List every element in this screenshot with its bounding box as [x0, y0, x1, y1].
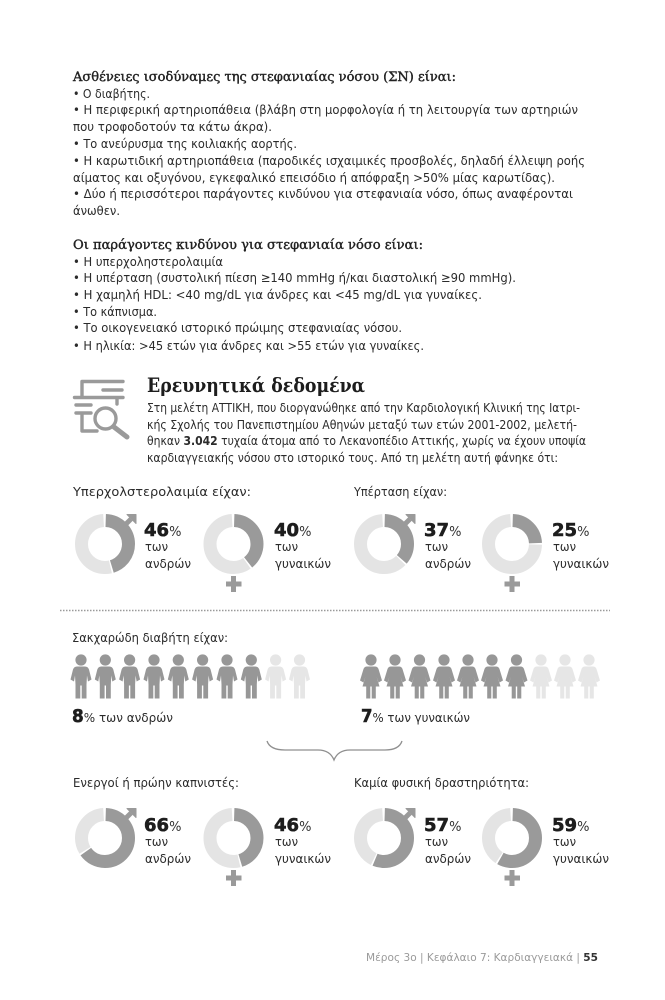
panel: smokers	[73, 776, 331, 886]
heading: risk factors: Οι παράγοντες κινδύνου για στεφανιαία νόσο είναι:	[73, 238, 423, 253]
list: risk factors: • Η υπερχοληστερολαιμία	[73, 255, 223, 270]
value: 59% of women: γυναικών	[553, 852, 609, 867]
value: 25% of women	[552, 520, 609, 572]
list: equivalent conditions: που τροφοδοτούν τα κάτω άκρα).	[73, 120, 272, 135]
text block: equivalent conditions of coronary disease	[72, 70, 585, 219]
list: equivalent conditions: • Η καρωτιδική αρτηριοπάθεια (παροδικές ισχαιμικές προσβολές, δηλαδή έλλειψη ροής	[73, 154, 585, 169]
value: 46% of men	[144, 520, 191, 572]
value: 25% of women: 25%	[552, 520, 589, 541]
list: equivalent conditions: • Το ανεύρυσμα της κοιλιακής αορτής.	[73, 137, 297, 152]
list: equivalent conditions: • Δύο ή περισσότεροι παράγοντες κινδύνου για στεφανιαία νόσο, όπως αναφέρονται	[73, 187, 573, 202]
value: 66% of men: των	[145, 835, 168, 850]
brace connector	[267, 741, 402, 760]
text block: ATTICA study intro: Στη μελέτη ΑΤΤΙΚΗ, που διοργανώθηκε από την Καρδιολογική Κλινική της Ιατρι-	[147, 401, 580, 416]
list: risk factors: • Το οικογενειακό ιστορικό πρώιμης στεφανιαίας νόσου.	[73, 321, 402, 336]
donut: 25% of women	[488, 520, 536, 592]
value: 37% of men: των	[425, 540, 448, 555]
text block: ATTICA study intro: κής Σχολής του Πανεπιστημίου Αθηνών μεταξύ των ετών 2001-2002, μελετή-	[147, 418, 577, 433]
section heading: research data: Ερευνητικά δεδομένα	[147, 373, 365, 397]
value: 46% of men: 46%	[144, 520, 181, 541]
donut: 46% of men	[82, 514, 136, 568]
value: 40% of women: γυναικών	[275, 557, 331, 572]
panel: hypercholesterolemia	[72, 485, 331, 592]
icon: books and magnifier	[74, 382, 127, 437]
list: risk factors: • Η χαμηλή HDL: <40 mg/dL για άνδρες και <45 mg/dL για γυναίκες.	[73, 288, 482, 303]
value: 46% of men: των	[145, 540, 168, 555]
donut: 46% of women	[210, 814, 257, 886]
value: 8% of men: 8% των ανδρών	[72, 706, 173, 727]
label: hypercholesterolemia: Υπερχολστερολαιμία είχαν:	[72, 485, 251, 500]
list: equivalent conditions: • Ο διαβήτης.	[73, 87, 150, 102]
text block: ATTICA study intro: καρδιαγγειακής νόσου στο ιστορικό τους. Από τη μελέτη αυτή φάνηκε ότι:	[147, 451, 558, 466]
list: equivalent conditions: αίματος και οξυγόνου, εγκεφαλικό επεισόδιο ή απόφραξη >50% μίας καρωτίδας).	[73, 171, 555, 186]
value: 37% of men	[424, 520, 471, 572]
label: diabetes: Σακχαρώδη διαβήτη είχαν:	[72, 631, 228, 646]
panel: no physical activity	[354, 776, 609, 886]
footer: page reference: Μέρος 3ο | Κεφάλαιο 7: Καρδιαγγειακά | 55	[366, 952, 598, 964]
value: 46% of women: γυναικών	[275, 852, 331, 867]
list: equivalent conditions: άνωθεν.	[73, 204, 120, 219]
pictogram: 7 of 10 women	[360, 654, 600, 698]
heading: equivalent conditions: Ασθένειες ισοδύναμες της στεφανιαίας νόσου (ΣΝ) είναι:	[72, 70, 456, 85]
value: 25% of women: γυναικών	[553, 557, 609, 572]
value: 59% of women: 59%	[552, 815, 589, 836]
value: 46% of women: των	[275, 835, 298, 850]
label: smokers: Ενεργοί ή πρώην καπνιστές:	[73, 776, 239, 791]
value: 40% of women: των	[275, 540, 298, 555]
donut: 37% of men	[360, 514, 415, 568]
value: 46% of women: 46%	[274, 815, 311, 836]
text block: ATTICA study intro	[147, 401, 586, 466]
text block: risk factors for coronary disease	[73, 238, 516, 354]
value: 66% of men: 66%	[144, 815, 181, 836]
donut: 66% of men	[82, 808, 136, 862]
value: 46% of women	[274, 815, 331, 867]
label: hypertension: Υπέρταση είχαν:	[353, 485, 447, 500]
list: risk factors: • Η υπέρταση (συστολική πίεση ≥140 mmHg ή/και διαστολική ≥90 mmHg).	[73, 271, 516, 286]
value: 59% of women	[552, 815, 609, 867]
list: equivalent conditions	[73, 87, 585, 219]
donut: 40% of women	[210, 520, 257, 592]
value: 57% of men: ανδρών	[425, 852, 471, 867]
value: 57% of men	[424, 815, 471, 867]
panel: hypertension	[353, 485, 609, 592]
value: 25% of women: των	[553, 540, 576, 555]
list: risk factors: • Η ηλικία: >45 ετών για άνδρες και >55 ετών για γυναίκες.	[73, 339, 424, 354]
text block: ATTICA study intro: θηκαν 3.042 τυχαία άτομα από το Λεκανοπέδιο Αττικής, χωρίς να έχουν υποψία	[147, 434, 586, 449]
value: 7% of women: 7% των γυναικών	[361, 706, 470, 727]
list: risk factors	[73, 255, 516, 354]
value: 66% of men: ανδρών	[145, 852, 191, 867]
pictogram: 8 of 10 men	[70, 654, 310, 698]
donut: 57% of men	[360, 808, 415, 862]
value: 37% of men: 37%	[424, 520, 461, 541]
donut: 59% of women	[488, 814, 536, 886]
panel: diabetes	[70, 631, 600, 727]
list: risk factors: • Το κάπνισμα.	[73, 305, 157, 320]
value: 37% of men: ανδρών	[425, 557, 471, 572]
value: 57% of men: 57%	[424, 815, 461, 836]
value: 66% of men	[144, 815, 191, 867]
label: no physical activity: Καμία φυσική δραστηριότητα:	[354, 776, 529, 791]
value: 59% of women: των	[553, 835, 576, 850]
list: equivalent conditions: • Η περιφερική αρτηριοπάθεια (βλάβη στη μορφολογία ή τη λειτουργία των αρτηριών	[73, 103, 578, 118]
value: 40% of women: 40%	[274, 520, 311, 541]
value: 57% of men: των	[425, 835, 448, 850]
value: 40% of women	[274, 520, 331, 572]
value: 46% of men: ανδρών	[145, 557, 191, 572]
